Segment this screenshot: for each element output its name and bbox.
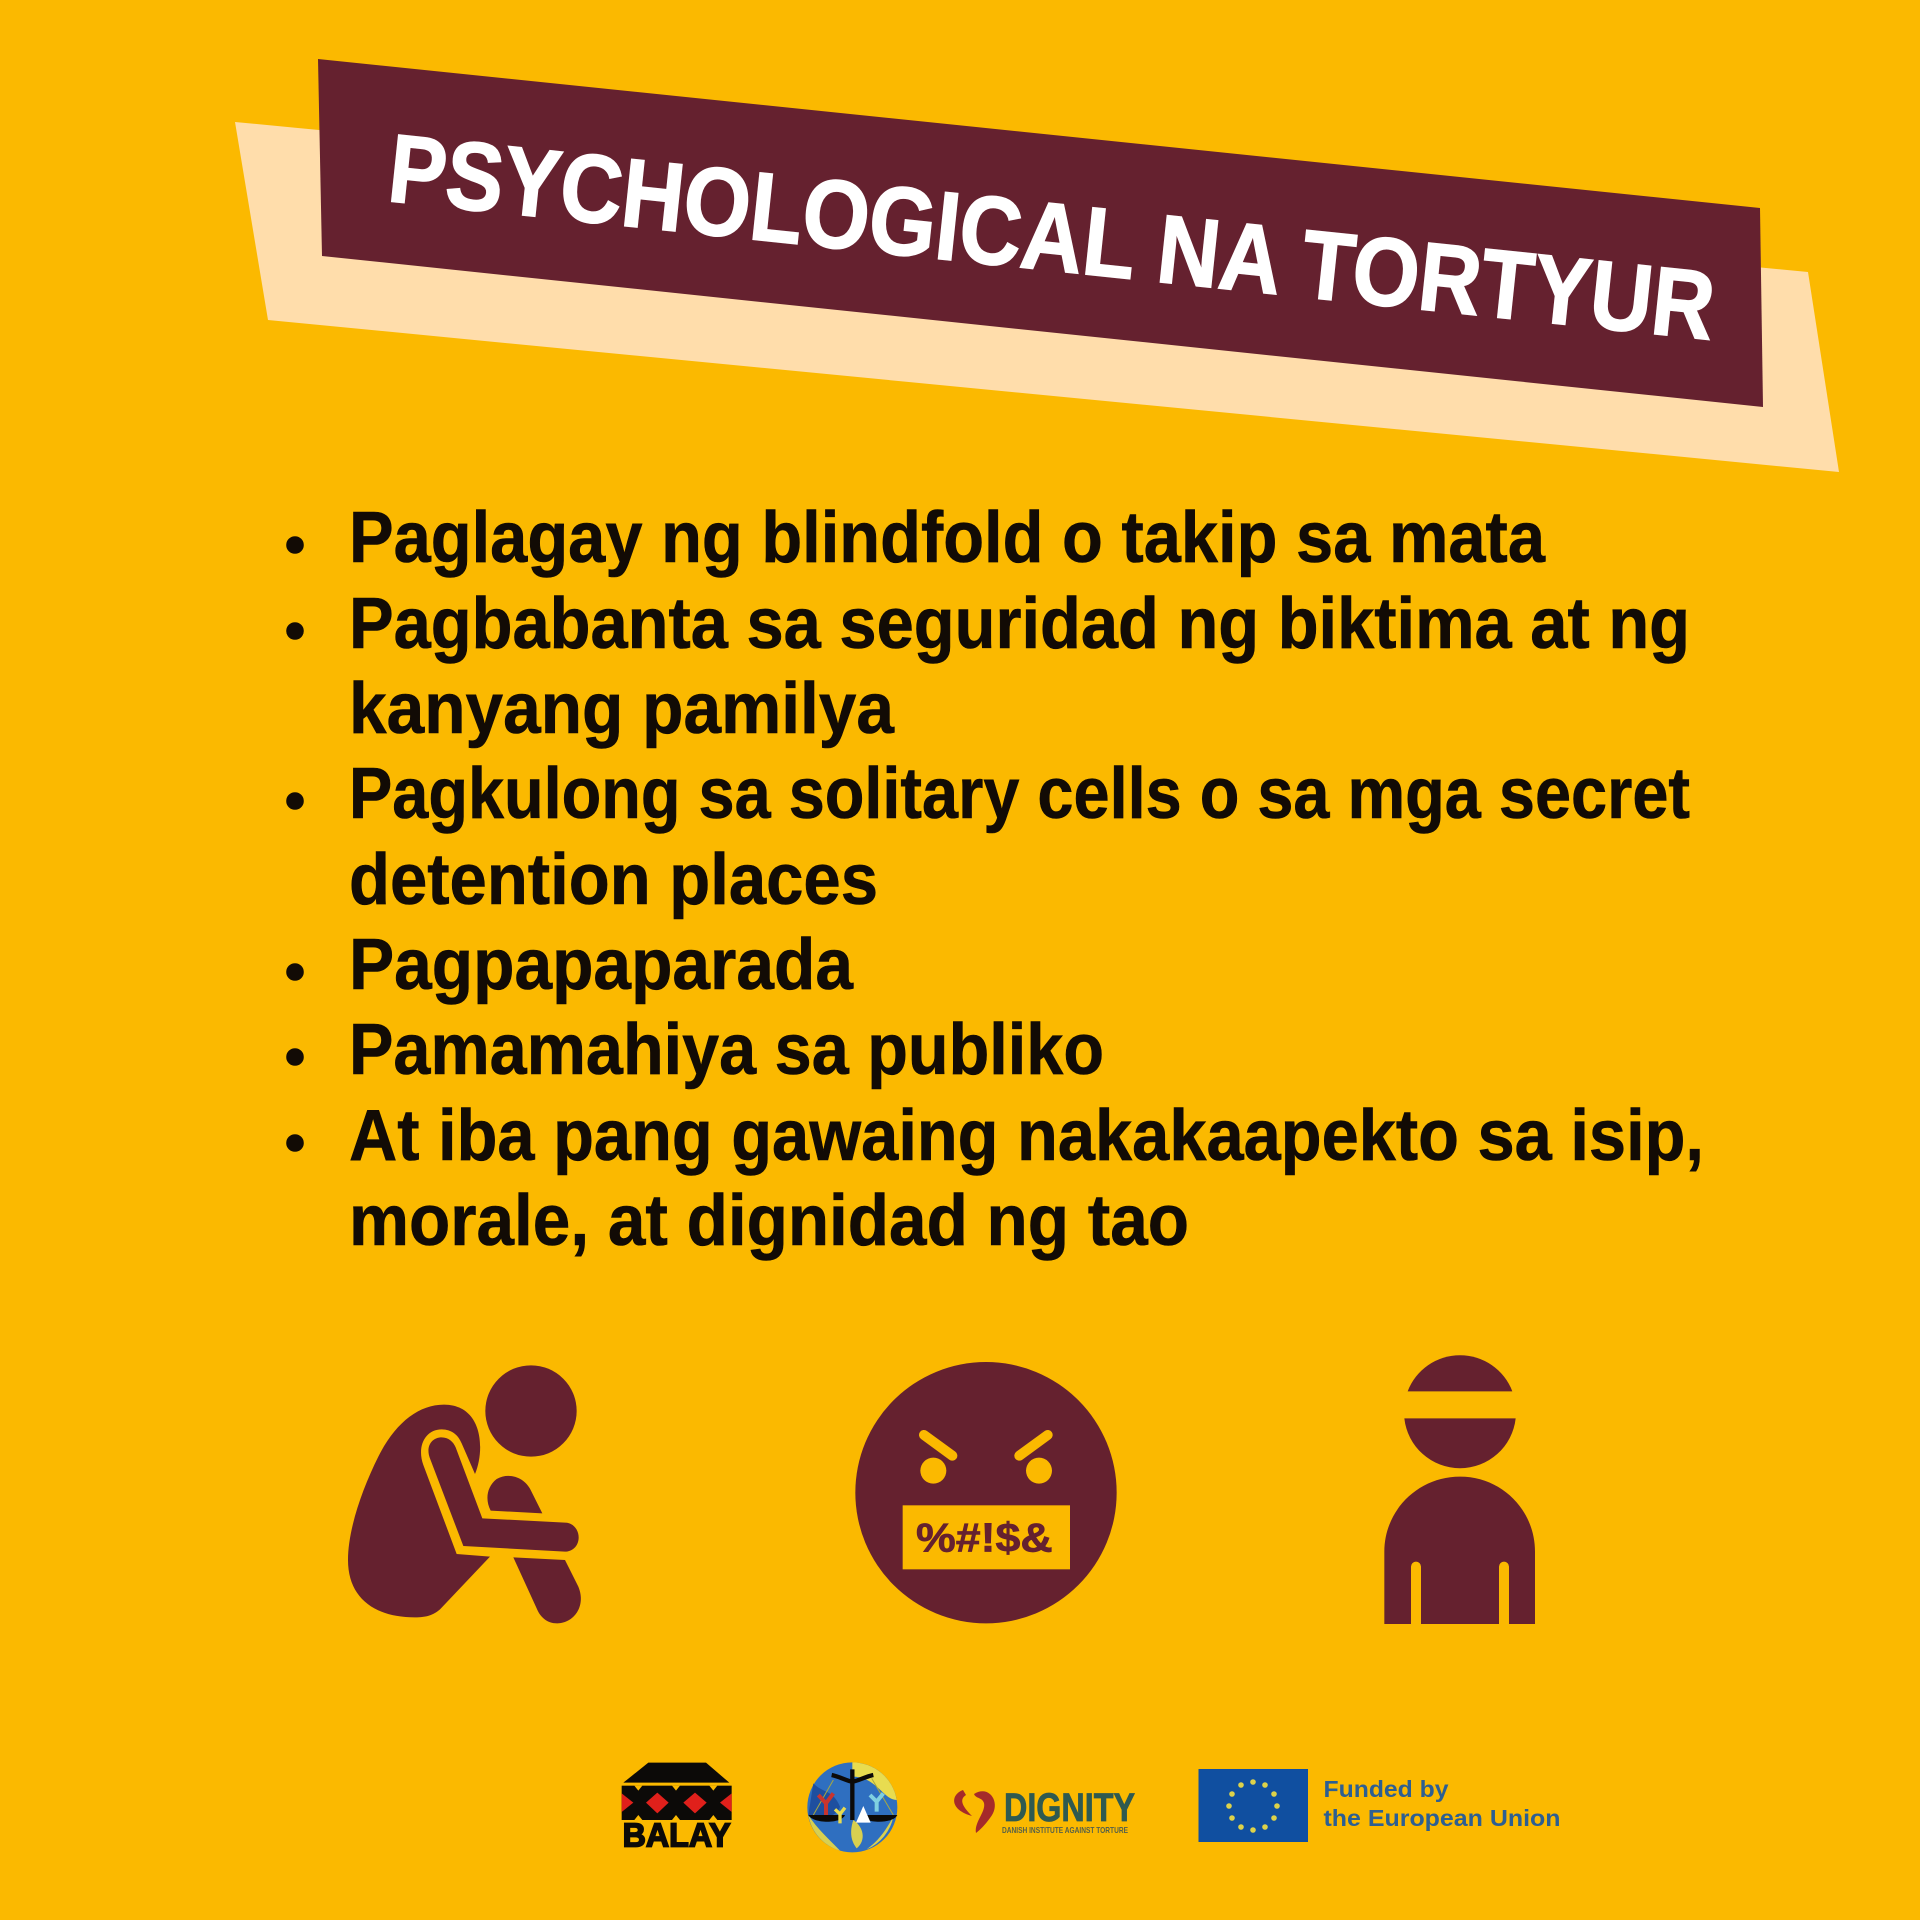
bullet item 3: Pagkulong sa solitary cells o sa mga secret xyxy=(349,754,1690,834)
logo: Dignity: DANISH INSTITUTE AGAINST TORTURE xyxy=(1002,1825,1128,1835)
logo: European Union flag xyxy=(1198,1769,1308,1842)
bullet item 2: kanyang pamilya xyxy=(349,669,895,749)
bullet item 3 xyxy=(286,754,1690,920)
bullet item 1: Paglagay ng blindfold o takip sa mata xyxy=(349,498,1546,578)
logo: Dignity: DIGNITY xyxy=(1004,1786,1135,1830)
funding text xyxy=(1324,1776,1560,1831)
bullet item 5: Pamamahiya sa publiko xyxy=(349,1010,1104,1090)
logo: globe with scales xyxy=(807,1762,897,1852)
bullet item 6 xyxy=(286,1096,1704,1261)
banner backing: cream strip xyxy=(235,122,1839,472)
icon: angry face with censored speech xyxy=(855,1362,1117,1623)
icon: person hugging knees xyxy=(348,1365,581,1623)
logo: Dignity xyxy=(954,1786,1135,1835)
logo: Balay: BALAY xyxy=(623,1818,731,1855)
bullet list xyxy=(286,498,1704,1261)
logo: Balay xyxy=(622,1763,732,1855)
icon: blindfolded person xyxy=(1384,1355,1535,1624)
bullet item 3: detention places xyxy=(349,840,878,920)
bullet item 2 xyxy=(286,584,1690,749)
funding text: the European Union xyxy=(1324,1805,1560,1831)
funding text: Funded by xyxy=(1324,1776,1448,1802)
title: PSYCHOLOGICAL NA TORTYUR xyxy=(384,113,1720,361)
bullet item 6: At iba pang gawaing nakakaapekto sa isip, xyxy=(349,1096,1704,1176)
bullet item 6: morale, at dignidad ng tao xyxy=(349,1181,1189,1261)
bullet item 4: Pagpapaparada xyxy=(349,925,854,1005)
bullet item 2: Pagbabanta sa seguridad ng biktima at ng xyxy=(349,584,1690,664)
icon: angry face with censored speech: %#!$& xyxy=(916,1515,1053,1561)
banner: maroon strip xyxy=(318,59,1763,407)
